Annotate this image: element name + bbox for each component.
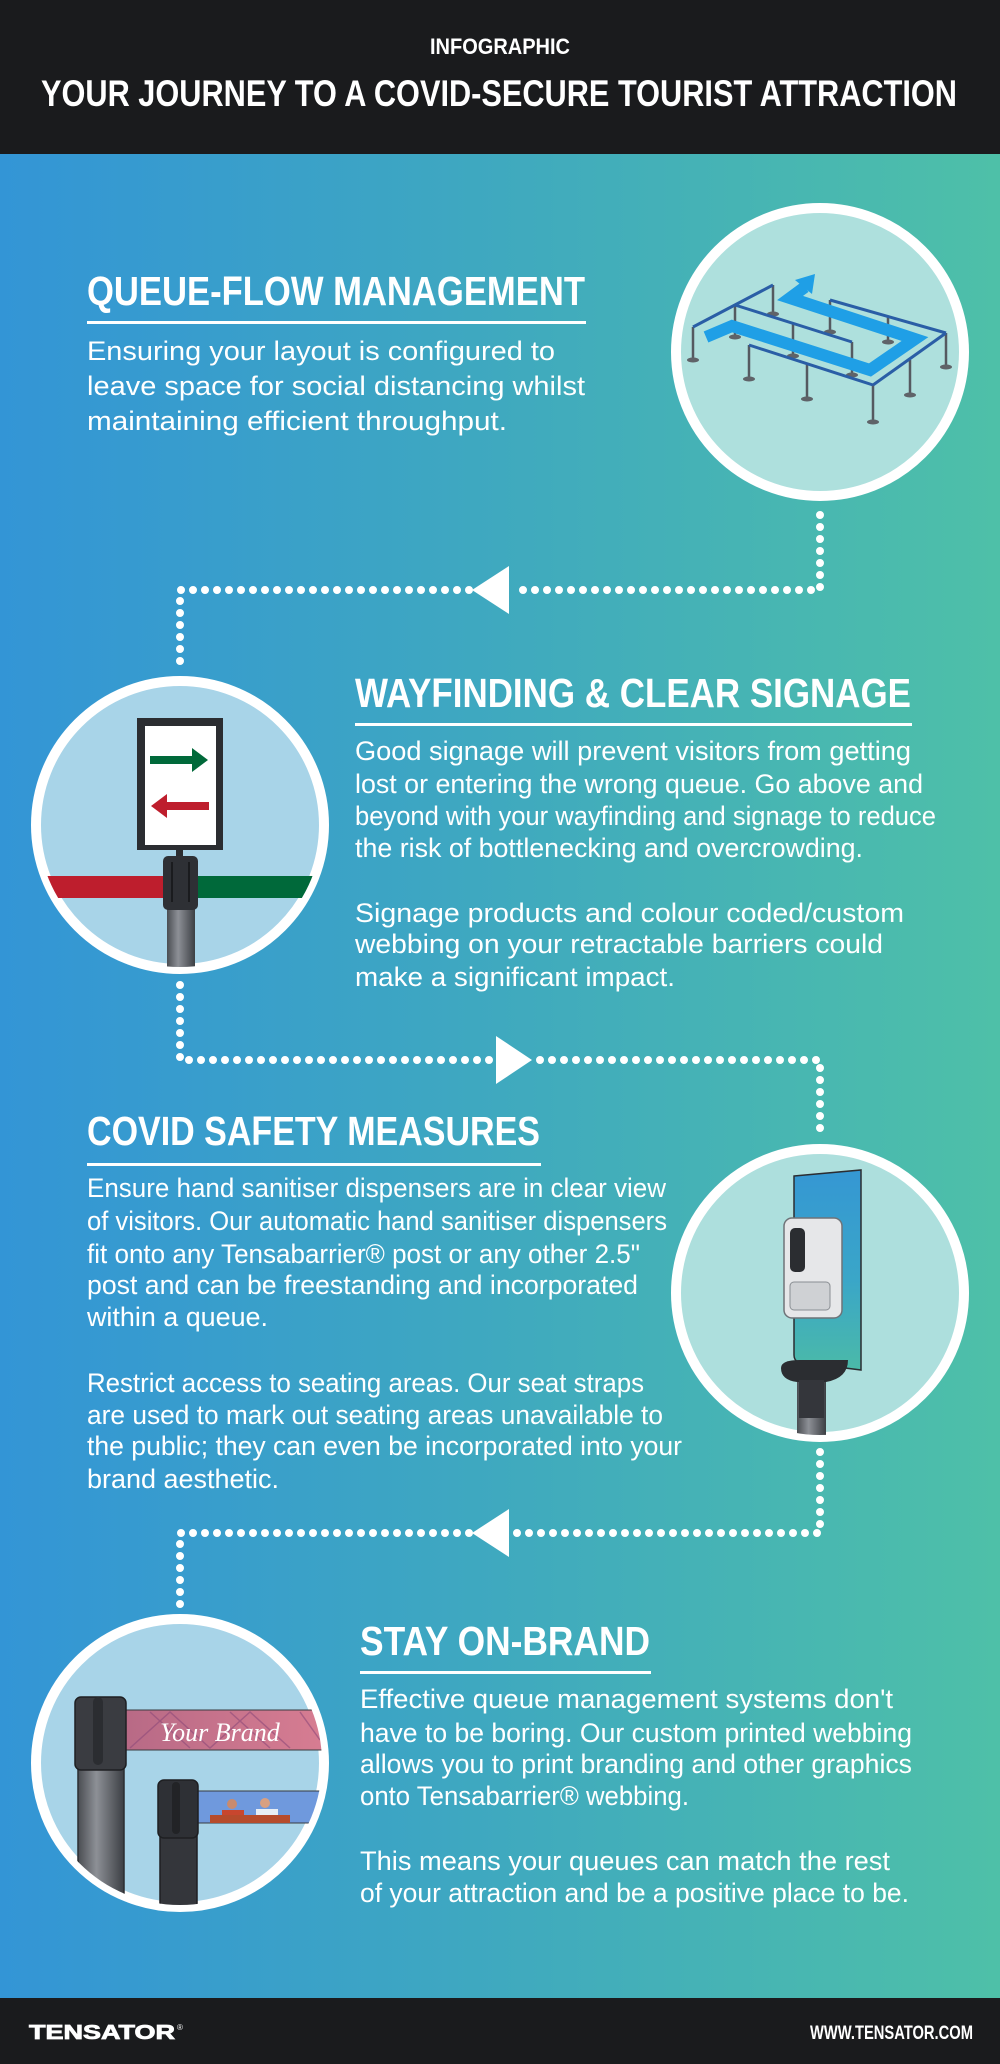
- section 2: wayfinding text: Good signage will prevent visitors from getting: [355, 736, 911, 766]
- footer: ®: [177, 2023, 183, 2032]
- section 4: stay on-brand text: allows you to print branding and other graphics: [360, 1749, 912, 1779]
- section 3: covid safety text: fit onto any Tensabarrier® post or any other 2.5": [87, 1239, 640, 1269]
- section 4: stay on-brand text: onto Tensabarrier® webbing.: [360, 1781, 689, 1811]
- footer: [0, 1998, 1000, 2064]
- section 2: wayfinding text: make a significant impact.: [355, 962, 675, 992]
- section 3: covid safety text: are used to mark out seating areas unavailable to: [87, 1400, 663, 1430]
- section 4: stay on-brand text: STAY ON-BRAND: [360, 1618, 650, 1664]
- icon: branded webbing posts circle: [36, 1619, 326, 1935]
- section 2: wayfinding text: [354, 670, 936, 992]
- dotted path 3 with left arrow: [180, 1452, 820, 1610]
- section 1: queue-flow management text: Ensuring your layout is configured to: [87, 336, 555, 366]
- section 2: wayfinding text: webbing on your retractable barriers could: [354, 929, 883, 959]
- dotted path 1 with left arrow: [180, 515, 820, 672]
- section 3: covid safety text: brand aesthetic.: [87, 1464, 279, 1494]
- section 4: stay on-brand text: Effective queue management systems don't: [360, 1684, 894, 1714]
- section 3: covid safety text: of visitors. Our automatic hand sanitiser dispensers: [87, 1206, 667, 1236]
- section 4: stay on-brand text: This means your queues can match the rest: [360, 1846, 890, 1876]
- section 2: wayfinding text: beyond with your wayfinding and signage to reduce: [355, 801, 936, 831]
- section 3: covid safety text: COVID SAFETY MEASURES: [87, 1108, 540, 1154]
- header: [0, 0, 1000, 154]
- section 3: covid safety text: post and can be freestanding and incorporated: [87, 1270, 638, 1300]
- icon: branded webbing posts circle: Your Brand: [160, 1718, 281, 1747]
- section 3: covid safety text: the public; they can even be incorporated into your: [87, 1431, 682, 1461]
- section 1: queue-flow management text: leave space for social distancing whilst: [87, 371, 586, 401]
- icon: queue layout circle: [676, 208, 964, 496]
- section 2: wayfinding text: Signage products and colour coded/custom: [355, 898, 904, 928]
- section 1: queue-flow management text: QUEUE-FLOW MANAGEMENT: [87, 268, 585, 314]
- section 1: queue-flow management text: [87, 268, 586, 436]
- section 3: covid safety text: Ensure hand sanitiser dispensers are in clear view: [87, 1173, 666, 1203]
- section 3: covid safety text: Restrict access to seating areas. Our seat straps: [87, 1368, 644, 1398]
- section 2: wayfinding text: lost or entering the wrong queue. Go above and: [355, 769, 923, 799]
- footer: TENSATOR: [29, 2022, 176, 2044]
- section 4: stay on-brand text: [360, 1618, 912, 1908]
- section 4: stay on-brand text: of your attraction and be a positive place to be.: [360, 1878, 909, 1908]
- icon: hand sanitiser stand circle: [676, 1149, 964, 1445]
- section 4: stay on-brand text: have to be boring. Our custom printed webbing: [360, 1718, 912, 1748]
- header: INFOGRAPHIC: [430, 34, 570, 59]
- section 2: wayfinding text: the risk of bottlenecking and overcrowding.: [355, 833, 863, 863]
- section 3: covid safety text: within a queue.: [86, 1302, 268, 1332]
- section 2: wayfinding text: WAYFINDING & CLEAR SIGNAGE: [355, 670, 911, 716]
- section 3: covid safety text: [86, 1108, 682, 1494]
- dotted path 2 with right arrow: [180, 985, 820, 1140]
- icon: signage post circle: [30, 681, 332, 985]
- section 1: queue-flow management text: maintaining efficient throughput.: [87, 406, 507, 436]
